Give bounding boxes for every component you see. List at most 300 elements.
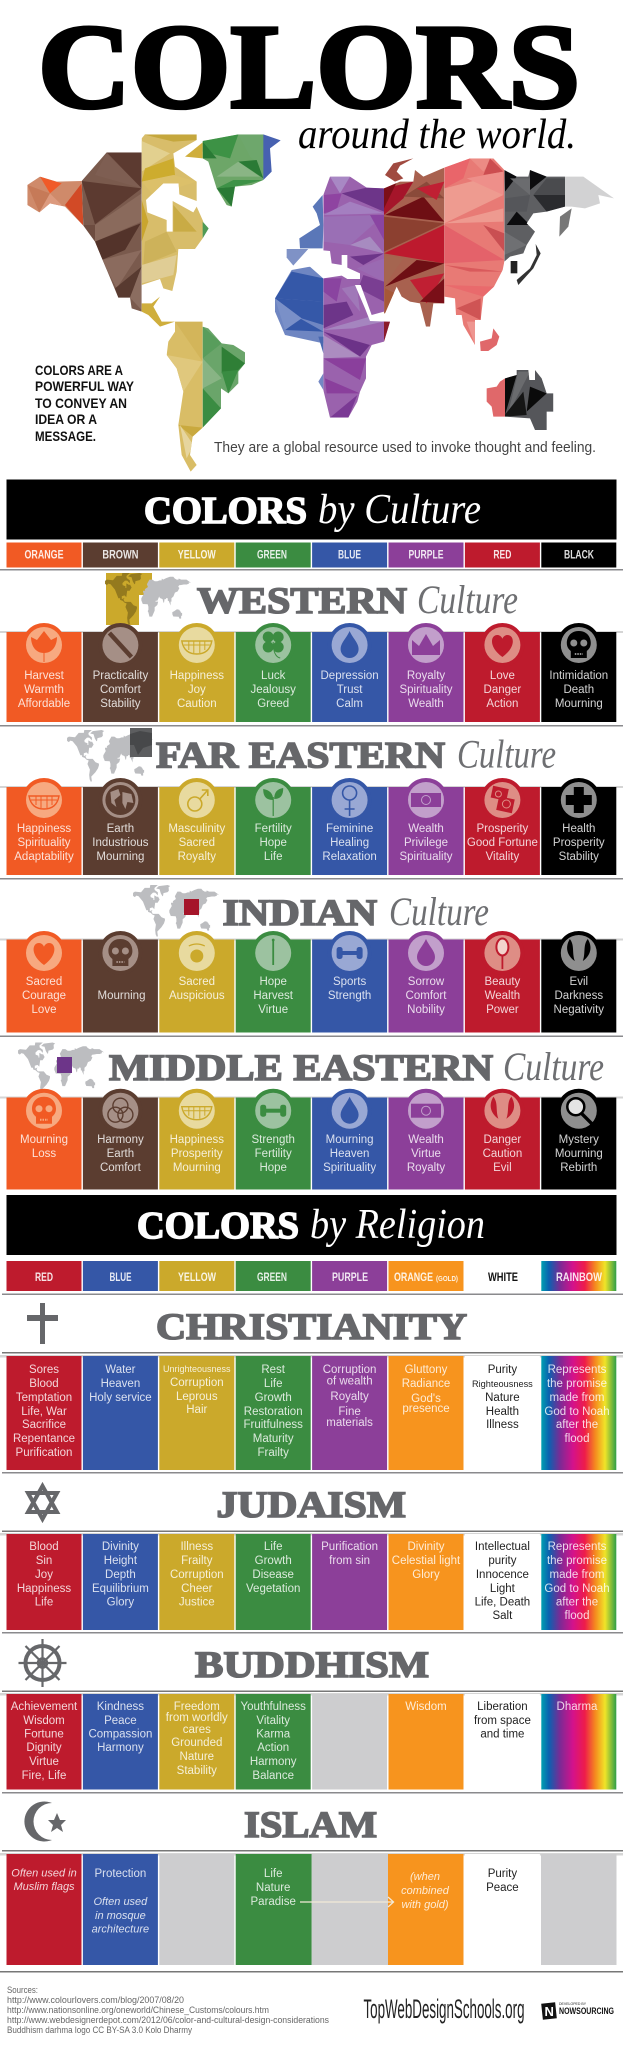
column: red: Blood (29, 1541, 59, 1553)
column: blue: Glory (107, 1596, 134, 1608)
column: orange: Adaptability (14, 851, 74, 863)
column: brown: Practicality (93, 670, 148, 682)
column: red: Evil (493, 1162, 512, 1174)
column: green: Hope (259, 1162, 287, 1174)
heading: Buddhism with dharma wheel (18, 1639, 429, 1687)
column: purple: Wealth (408, 823, 444, 835)
banner: colors by culture: COLORS (144, 490, 307, 532)
colour legend: culture: BLUE (338, 548, 361, 562)
column: red: Wisdom (23, 1715, 65, 1727)
column: blue: Calm (336, 698, 363, 710)
banner: colors by culture: by Culture (318, 487, 481, 533)
column: white: and time (480, 1728, 524, 1740)
column: orange gold: Divinity (407, 1541, 445, 1553)
column: red: Repentance (13, 1433, 75, 1445)
icon: banknote (411, 793, 441, 807)
banner: colors by religion: COLORS (137, 1205, 299, 1247)
column: blue: Peace (104, 1715, 137, 1727)
column: black: Intimidation (549, 670, 608, 682)
column: orange gold: Radiance (402, 1378, 450, 1390)
column: red: Beauty (484, 976, 521, 988)
column: blue: Relaxation (322, 851, 377, 863)
column: purple (388, 931, 464, 1032)
colour legend: culture: RED (493, 548, 512, 562)
column: blue (312, 778, 387, 875)
column: blue: Healing (330, 837, 369, 849)
column: white (465, 1694, 540, 1790)
column: white: Purity (488, 1868, 517, 1880)
column: brown: Stability (100, 698, 141, 710)
column: white: Purity (488, 1364, 517, 1376)
column: empty yellow (159, 1854, 234, 1965)
column: yellow: Hair (186, 1404, 208, 1416)
column: yellow: Stability (177, 1765, 217, 1777)
column: black: Mourning (555, 698, 603, 710)
column: black (541, 778, 616, 875)
column: green: Paradise (251, 1896, 296, 1908)
column: white: Nature (485, 1392, 520, 1404)
column: green: Life (264, 1868, 282, 1880)
column: red (6, 1534, 82, 1630)
column: brown: Earth (107, 1148, 134, 1160)
column: purple: Spirituality (399, 851, 453, 863)
icon: drop (341, 1097, 359, 1124)
heading: Far Eastern Culture (67, 728, 556, 782)
column: white: purity (488, 1555, 517, 1567)
column: red: Good Fortune (467, 837, 538, 849)
column: yellow: Happiness (170, 670, 224, 682)
column: blue: Heaven (330, 1148, 369, 1160)
heading: Indian Culture: Culture (389, 889, 489, 934)
column: purple (312, 1356, 387, 1470)
column: green: Rest (261, 1364, 286, 1376)
column: orange gold: Celestial light (392, 1555, 461, 1567)
panel: far eastern culture (0, 778, 623, 875)
icon: heart (34, 943, 54, 965)
sources (7, 1985, 329, 2035)
column: blue: Heaven (101, 1378, 140, 1390)
column: orange gold (388, 1854, 464, 1965)
column: purple: of wealth (327, 1376, 373, 1388)
column: green: Youthfulness (240, 1701, 306, 1713)
column: black: Death (563, 684, 594, 696)
column: purple: from sin (329, 1555, 370, 1567)
column: green (236, 1089, 311, 1190)
icon: star of David (28, 1486, 57, 1519)
column: red: Temptation (16, 1392, 72, 1404)
column: brown: Comfort (100, 684, 142, 696)
heading: Far Eastern Culture: FAR EASTERN (156, 736, 445, 776)
heading: Buddhism with dharma wheel: BUDDHISM (195, 1645, 429, 1686)
column: yellow (159, 623, 234, 722)
column: red: Action (486, 698, 518, 710)
heading: Middle Eastern Culture (18, 1043, 604, 1095)
column: green: Maturity (253, 1433, 294, 1445)
column: purple: Wealth (408, 1134, 444, 1146)
column: red: Fortune (24, 1728, 64, 1740)
icon: mirror (496, 938, 508, 969)
column: red: Life, War (21, 1406, 67, 1418)
column: yellow: Justice (179, 1596, 215, 1608)
column: yellow: Happiness (170, 1134, 224, 1146)
column: green: Balance (252, 1770, 294, 1782)
column: purple: Sorrow (408, 976, 445, 988)
banner: colors by religion (6, 1195, 616, 1255)
column: yellow: Joy (188, 684, 206, 696)
colour legend: religion: WHITE (488, 1270, 518, 1284)
icon: drop (341, 631, 359, 658)
column: purple: Privilege (404, 837, 448, 849)
column: yellow: Mourning (173, 1162, 221, 1174)
column: blue (83, 1854, 158, 1965)
column: brown (83, 623, 158, 722)
column: orange gold (388, 1356, 464, 1470)
column: green: Karma (256, 1728, 291, 1740)
column: red: Often used in (11, 1868, 77, 1880)
icon: crown (412, 634, 440, 655)
column: white: from space (474, 1715, 531, 1727)
column: rainbow: after the (556, 1596, 598, 1608)
column: white: Liberation (477, 1701, 528, 1713)
column: blue: Protection (95, 1868, 146, 1880)
column: black: Mourning (555, 1148, 603, 1160)
column: yellow (159, 1694, 234, 1790)
banner: colors by religion: by Religion (310, 1202, 485, 1248)
panel: buddhism (0, 1693, 623, 1790)
column: red: Sin (36, 1555, 52, 1567)
column: purple: Nobility (407, 1004, 445, 1016)
column: yellow (159, 778, 234, 875)
column: orange (6, 778, 82, 875)
column: rainbow: the promise (547, 1378, 607, 1390)
column: orange gold: (when (410, 1871, 440, 1883)
column: orange: Sacred (26, 976, 62, 988)
colour legend: religion: YELLOW (178, 1270, 216, 1284)
column: black: Stability (559, 851, 599, 863)
column: red: Prosperity (477, 823, 529, 835)
column: black: Darkness (555, 990, 603, 1002)
column: rainbow (541, 1356, 616, 1470)
column: blue: Water (105, 1364, 136, 1376)
icon: female symbol (343, 786, 357, 816)
icon: cross (27, 1303, 58, 1344)
column: green: Hope (259, 837, 287, 849)
column: blue (83, 1694, 158, 1790)
column: red (465, 778, 540, 875)
column: orange: Courage (22, 990, 66, 1002)
logo: NowSourcing (541, 2002, 614, 2020)
column: red (465, 623, 540, 722)
column: orange gold: presence (402, 1403, 450, 1415)
column: blue: Depression (321, 670, 379, 682)
column: blue: Kindness (97, 1701, 144, 1713)
subtitle: around the world: around the world. (298, 112, 576, 158)
column: green: Disease (252, 1569, 294, 1581)
intro text: colors are a powerful way: MESSAGE. (35, 428, 96, 444)
column: brown (83, 778, 158, 875)
column: red: Power (486, 1004, 519, 1016)
column: yellow: cares (183, 1724, 211, 1736)
column: yellow: Prosperity (171, 1148, 223, 1160)
column: purple: Royalty (407, 1162, 445, 1174)
column: orange: Love (32, 1004, 56, 1016)
column: red: Wealth (485, 990, 520, 1002)
icon: magnifier (567, 1098, 592, 1124)
column: rainbow: Represents (548, 1541, 607, 1553)
column: white: Intellectual (475, 1541, 530, 1553)
column: orange gold (388, 1534, 464, 1630)
column: green: Growth (255, 1392, 292, 1404)
column: yellow: Frailty (181, 1555, 213, 1567)
icon: clover (263, 632, 284, 658)
icon: horns (491, 1097, 514, 1119)
column: brown: Industrious (92, 837, 149, 849)
column: white: Light (490, 1583, 516, 1595)
column: green: Life (264, 1541, 282, 1553)
colour legend: culture: BROWN (102, 548, 138, 562)
column: red: Dignity (26, 1742, 62, 1754)
column: blue: Compassion (88, 1728, 152, 1740)
column: red: Sores (29, 1364, 59, 1376)
column: green: Frailty (258, 1447, 289, 1459)
column: rainbow: flood (565, 1610, 589, 1622)
column: red (6, 1854, 82, 1965)
column: white: Life, Death (475, 1596, 530, 1608)
column: blue: Often used (93, 1896, 148, 1908)
column: blue (83, 1356, 158, 1470)
column: green: Harvest (253, 990, 294, 1002)
column: green (236, 623, 311, 722)
column: red: Danger (484, 684, 521, 696)
heading: Islam with crescent (24, 1801, 377, 1846)
column: green: Fruitfulness (243, 1419, 303, 1431)
column: brown: Earth (107, 823, 134, 835)
column: green (236, 1356, 311, 1470)
world map (20, 132, 614, 475)
colour legend: culture: ORANGE (24, 548, 64, 562)
column: orange (6, 1089, 82, 1190)
column: green: Vitality (256, 1715, 290, 1727)
column: rainbow (541, 1534, 616, 1630)
column: orange gold: Wisdom (405, 1701, 447, 1713)
column: orange: Loss (32, 1148, 56, 1160)
column: brown (83, 931, 158, 1032)
icon: sprout (263, 788, 283, 816)
icon: pencil (109, 633, 131, 657)
column: red: Achievement (11, 1701, 78, 1713)
column: blue: Height (104, 1555, 138, 1567)
column: yellow (159, 931, 234, 1032)
column: purple: Royalty (330, 1391, 369, 1403)
heading: Judaism with star: JUDAISM (216, 1485, 406, 1526)
colour legend: religion: (GOLD) (436, 1276, 458, 1283)
column: empty rainbow (541, 1854, 616, 1965)
column: purple (312, 1534, 387, 1630)
column: purple (388, 778, 464, 875)
colour legend: culture: YELLOW (178, 548, 216, 562)
column: purple: Royalty (407, 670, 445, 682)
column: blue: Divinity (102, 1541, 139, 1553)
icon: three rings (108, 1098, 133, 1122)
column: brown (83, 1089, 158, 1190)
column: red: Love (490, 670, 515, 682)
icon: horns (567, 939, 591, 961)
column: orange: Harvest (24, 670, 65, 682)
column: yellow (159, 1089, 234, 1190)
column: blue (312, 1089, 387, 1190)
column: red: Vitality (486, 851, 519, 863)
panel: western culture (0, 623, 623, 722)
column: black: Rebirth (560, 1162, 597, 1174)
map: Europe, Africa, Asia, Australia (273, 157, 614, 432)
column: green: Greed (257, 698, 289, 710)
column: blue: in mosque (95, 1910, 146, 1922)
colour legend: culture: GREEN (257, 548, 287, 562)
colour legend: religion: PURPLE (332, 1270, 368, 1284)
column: red: Fire, Life (22, 1770, 66, 1782)
colour legend: religion: GREEN (257, 1270, 287, 1284)
column: blue: Spirituality (323, 1162, 376, 1174)
banner: colors by culture (6, 480, 616, 540)
column: red: Purification (16, 1447, 72, 1459)
column: yellow: Cheer (181, 1583, 213, 1595)
column: purple: materials (326, 1417, 373, 1429)
column: rainbow (541, 1694, 616, 1790)
icon: tulip (31, 631, 57, 662)
column: black: Health (562, 823, 595, 835)
heading: Christianity with cross: CHRISTIANITY (156, 1307, 467, 1348)
colour legend: religion: RED (35, 1270, 53, 1284)
column: orange: Affordable (18, 698, 70, 710)
column: yellow: Freedom (174, 1701, 220, 1713)
colour legend: culture: PURPLE (408, 548, 444, 562)
column: purple (388, 1089, 464, 1190)
column: yellow (159, 1534, 234, 1630)
column: yellow: Masculinity (168, 823, 225, 835)
icon: male symbol (188, 790, 208, 811)
heading: Western Culture (105, 573, 518, 625)
column: red: Happiness (17, 1583, 71, 1595)
column: empty purple (312, 1694, 387, 1790)
column: blue (312, 623, 387, 722)
column: green: Life (264, 851, 282, 863)
column: green: Growth (255, 1555, 292, 1567)
column: red (465, 1089, 540, 1190)
column: white: Illness (486, 1419, 519, 1431)
column: yellow: Unrighteousness (163, 1364, 231, 1374)
column: yellow: Sacred (179, 976, 215, 988)
colour legend: religion: ORANGE (394, 1270, 433, 1284)
column: blue: Mourning (326, 1134, 374, 1146)
column: rainbow: Dharma (557, 1701, 598, 1713)
heading: Christianity with cross (27, 1303, 467, 1348)
column: blue: Strength (328, 990, 371, 1002)
column: blue: Harmony (97, 1742, 144, 1754)
sources: http://www.webdesignerdepot.com/2012/06/color-and-cultural-design-considerations (7, 2015, 329, 2025)
icon: smile (182, 1107, 212, 1120)
column: white: Innocence (476, 1569, 529, 1581)
column: rainbow: made from (550, 1392, 604, 1404)
column: green: Life (264, 1378, 282, 1390)
column: orange: Spirituality (17, 837, 71, 849)
column: orange: Mourning (20, 1134, 68, 1146)
column: green: Jealousy (251, 684, 296, 696)
column: rainbow: God to Noah (544, 1583, 610, 1595)
sources: Buddhism darhma logo CC BY-SA 3.0 Kolo Dharmy (7, 2025, 192, 2035)
heading: Middle Eastern Culture: Culture (503, 1044, 604, 1089)
icon: skull (108, 939, 132, 966)
column: green: Strength (251, 1134, 295, 1146)
column: purple: Corruption (323, 1364, 376, 1376)
icon: drop (417, 939, 435, 966)
arrow: green to gold (300, 1897, 394, 1907)
column: white: Health (486, 1406, 519, 1418)
column: rainbow: made from (550, 1569, 604, 1581)
column: white: Salt (492, 1610, 513, 1622)
column: blue: Sports (333, 976, 366, 988)
column: yellow: Sacred (179, 837, 215, 849)
heading: Indian Culture: INDIAN (222, 893, 377, 934)
column: yellow: Corruption (170, 1377, 224, 1389)
column: red: Sacrifice (22, 1419, 66, 1431)
column: rainbow: Represents (548, 1364, 607, 1376)
column: purple: Comfort (406, 990, 447, 1002)
panel: christianity (0, 1355, 623, 1470)
column: blue: architecture (92, 1924, 149, 1936)
column: white: Righteousness (472, 1379, 533, 1389)
icon: dumbbell (337, 947, 363, 959)
column: rainbow: after the (556, 1419, 598, 1431)
icon: skull (32, 1097, 56, 1124)
column: yellow (159, 1356, 234, 1470)
colour legend: culture (6, 542, 616, 568)
column: yellow: Caution (177, 698, 217, 710)
column: red: Muslim flags (13, 1881, 75, 1893)
heading: Judaism with star (28, 1485, 406, 1526)
icon: skull (567, 631, 591, 658)
column: black: Prosperity (553, 837, 605, 849)
column: yellow: Royalty (178, 851, 216, 863)
column: green: Hope (259, 976, 287, 988)
column: yellow: from worldly (166, 1712, 228, 1724)
colour legend: religion: RAINBOW (556, 1270, 603, 1284)
heading: Western Culture: Culture (417, 577, 518, 622)
intro text: colors are a powerful way (35, 362, 135, 444)
column: black (541, 1089, 616, 1190)
column: black: Evil (570, 976, 588, 988)
intro text: colors are a powerful way: IDEA OR A (35, 411, 97, 427)
heading: Islam with crescent: ISLAM (244, 1805, 377, 1846)
map: the Americas (20, 132, 281, 475)
column: rainbow: flood (565, 1433, 589, 1445)
panel: middle eastern culture (0, 1089, 623, 1190)
column: blue: Depth (105, 1569, 136, 1581)
column: purple: Virtue (411, 1148, 441, 1160)
column: brown: Mourning (98, 990, 145, 1002)
column: purple: Spirituality (399, 684, 453, 696)
column: brown: Mourning (96, 851, 144, 863)
column: red: Blood (29, 1378, 59, 1390)
column: blue: Feminine (326, 823, 373, 835)
sources: http://www.nationsonline.org/oneworld/Chinese_Customs/colours.htm (7, 2005, 269, 2015)
icon: dharma wheel (18, 1639, 66, 1687)
column: red (465, 931, 540, 1032)
icon: candle (272, 939, 275, 965)
title: COLORS: COLORS (38, 0, 580, 133)
panel: indian culture (0, 931, 623, 1032)
column: yellow: Auspicious (169, 990, 225, 1002)
column: green: Action (257, 1742, 289, 1754)
